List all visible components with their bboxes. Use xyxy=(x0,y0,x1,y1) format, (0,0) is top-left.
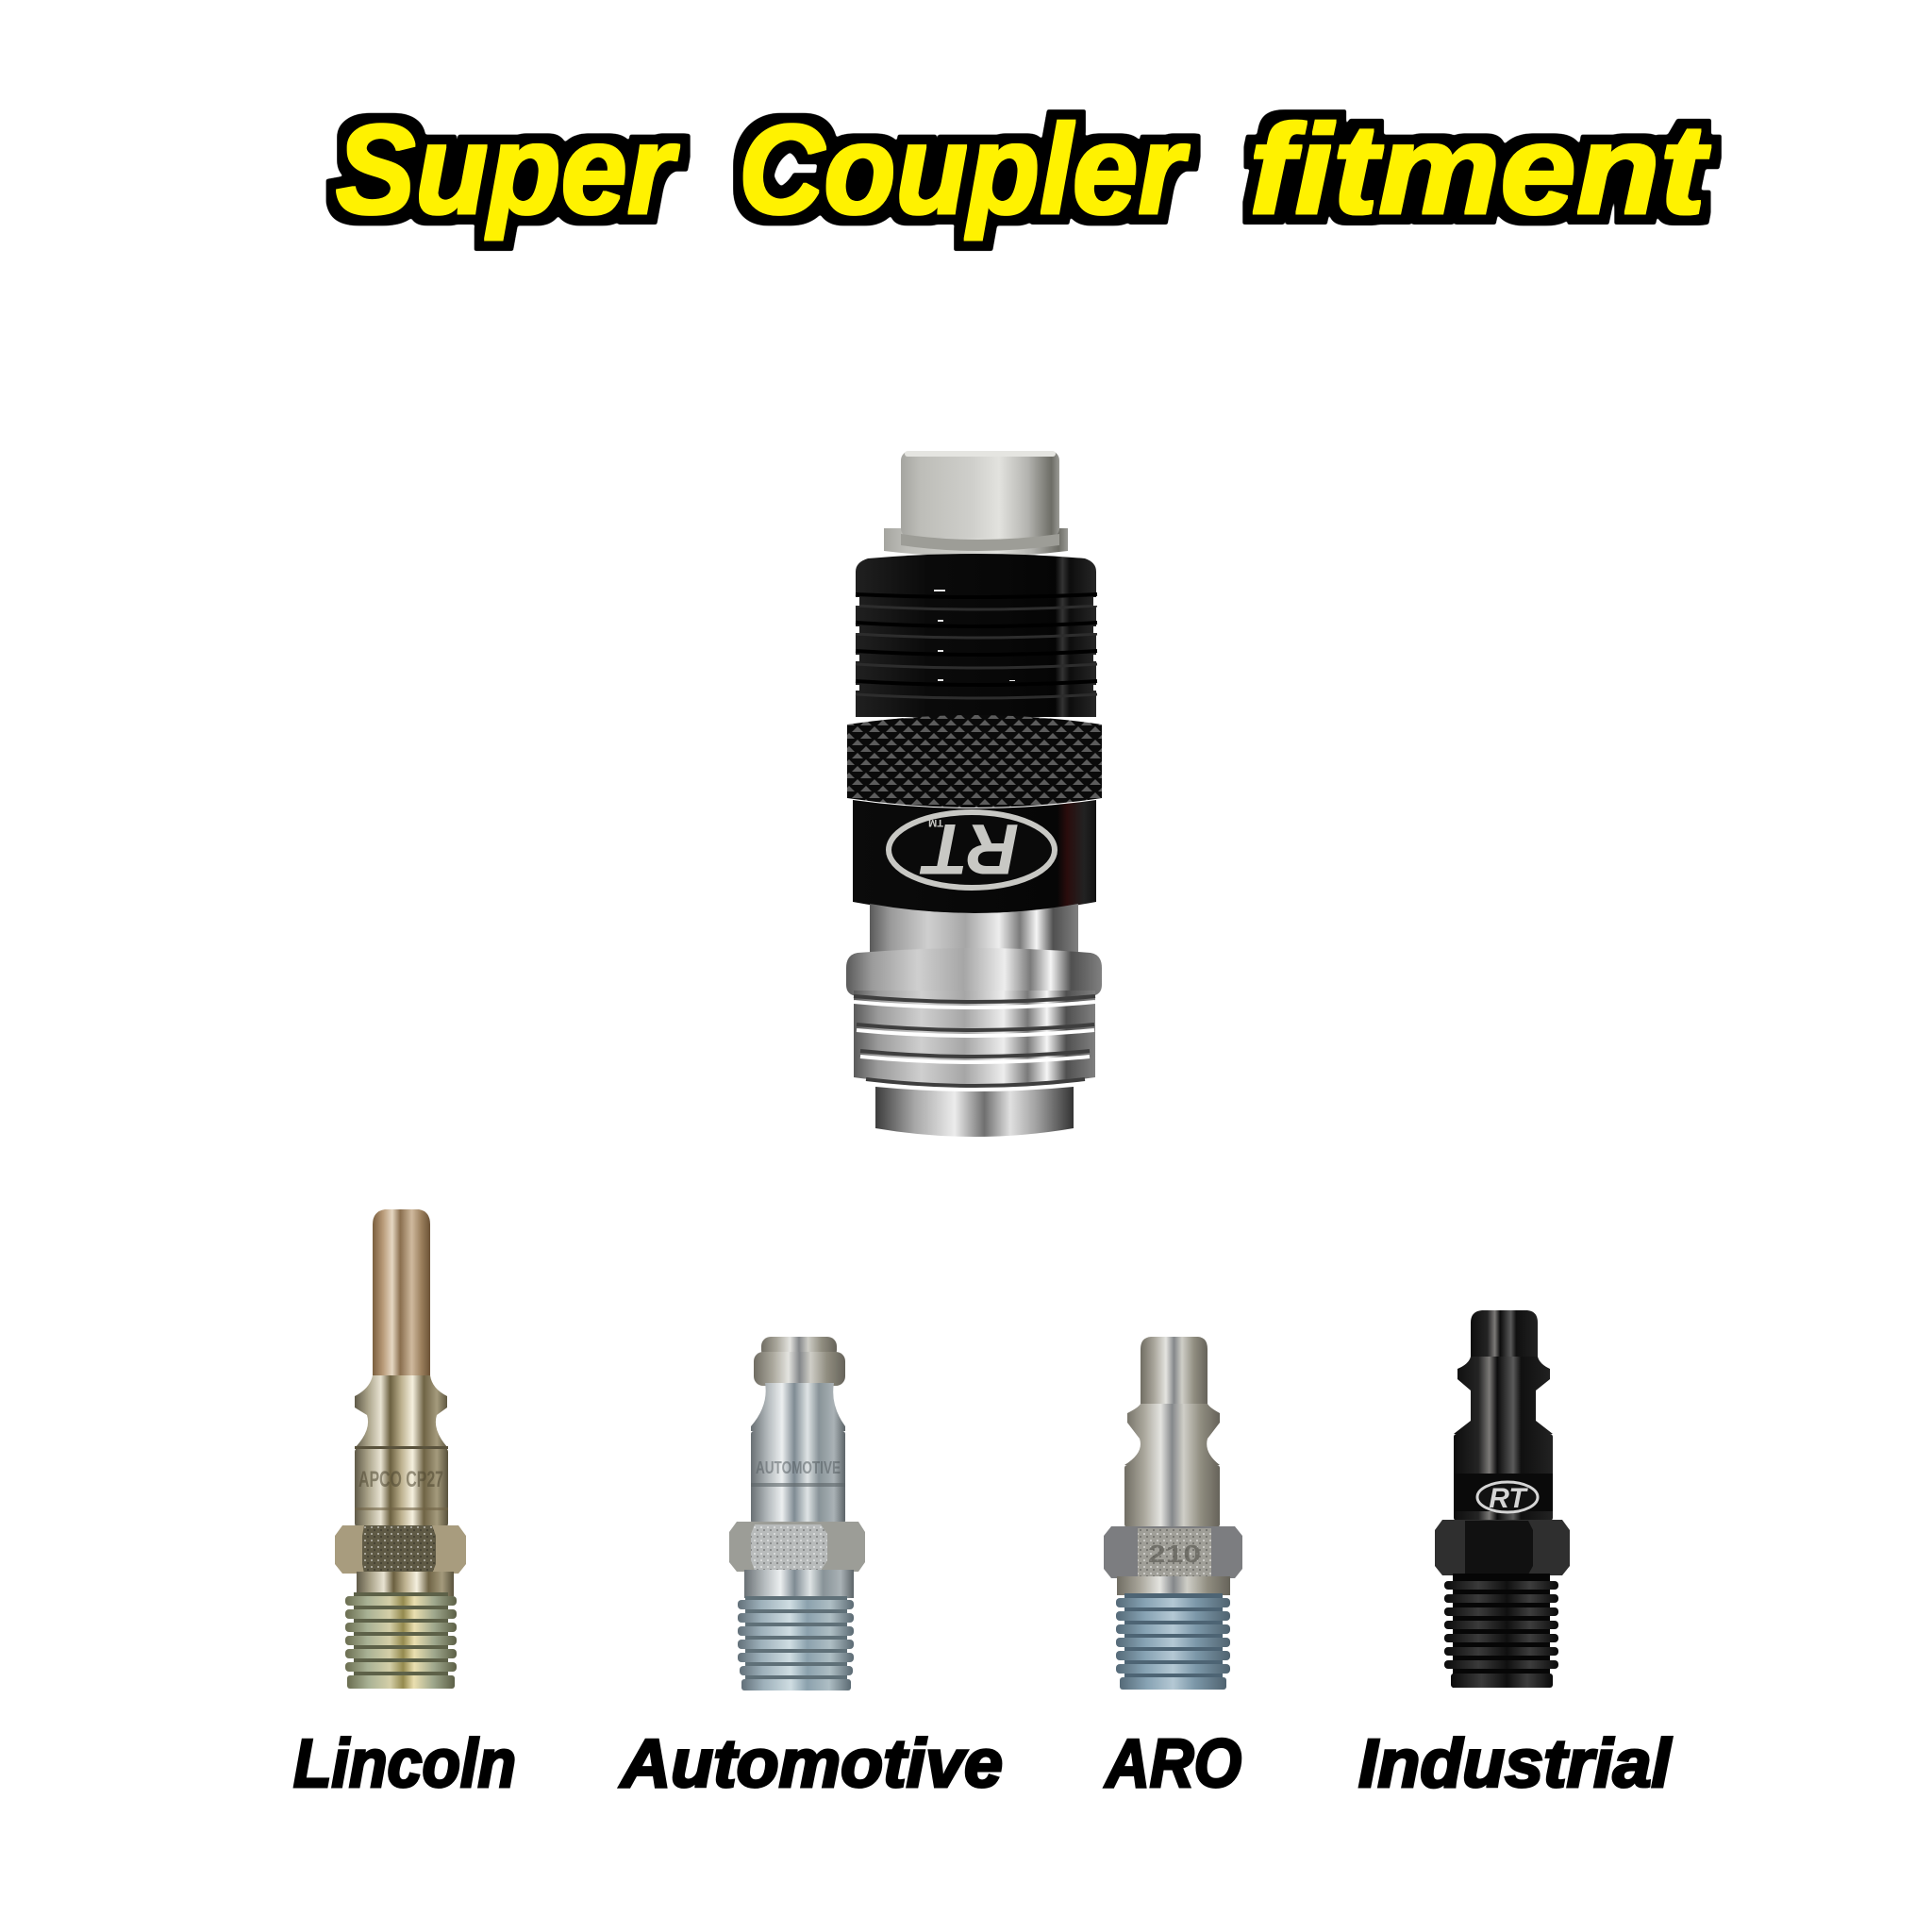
logo oval: TM xyxy=(928,817,943,828)
label: Automotive: Automotive xyxy=(619,1726,1003,1802)
ARO hex xyxy=(1104,1526,1242,1578)
Industrial logo xyxy=(1477,1482,1538,1514)
Industrial logo: RT xyxy=(1489,1483,1528,1514)
ARO thread xyxy=(1116,1593,1230,1690)
Automotive barrel xyxy=(751,1383,845,1524)
Automotive barrel: AUTOMOTIVE xyxy=(756,1458,841,1477)
Automotive hex xyxy=(729,1522,865,1572)
ARO hex: 210 xyxy=(1148,1540,1201,1568)
coupler black grooved body xyxy=(854,554,1099,717)
title: Super xyxy=(336,98,679,241)
Lincoln barrel: APCO CP27 xyxy=(358,1467,443,1492)
ARO collar xyxy=(1117,1576,1230,1595)
Automotive collar xyxy=(744,1570,854,1598)
Automotive thread xyxy=(738,1596,854,1690)
Lincoln collar xyxy=(357,1572,454,1596)
logo oval: RT xyxy=(919,808,1019,889)
Industrial thread xyxy=(1444,1574,1558,1688)
Industrial barrel xyxy=(1454,1357,1553,1521)
coupler knurled grip xyxy=(847,715,1102,808)
ARO barrel xyxy=(1124,1404,1220,1527)
coupler top sleeve xyxy=(884,451,1068,557)
ARO pin xyxy=(1141,1337,1208,1407)
plug: Automotive xyxy=(729,1337,865,1690)
title: fitment xyxy=(1249,98,1710,241)
label: Industrial: Industrial xyxy=(1358,1726,1673,1802)
Lincoln thread xyxy=(345,1592,457,1689)
label: ARO: ARO xyxy=(1104,1726,1241,1802)
Lincoln barrel xyxy=(355,1375,448,1527)
coupler chrome ribs xyxy=(854,991,1095,1086)
coupler lower black band xyxy=(853,800,1096,913)
plug: Lincoln xyxy=(335,1209,466,1689)
label: Lincoln: Lincoln xyxy=(293,1726,516,1802)
plug: ARO xyxy=(1104,1337,1242,1690)
Automotive tip xyxy=(754,1337,845,1386)
Industrial hex xyxy=(1435,1520,1570,1575)
title xyxy=(336,98,1710,241)
coupler chrome collar xyxy=(846,948,1102,996)
Lincoln pin xyxy=(373,1209,430,1379)
coupler chrome base xyxy=(875,1087,1074,1137)
main coupler xyxy=(846,451,1102,1137)
logo oval xyxy=(889,808,1055,889)
plug: Industrial xyxy=(1435,1310,1570,1688)
coupler chrome neck xyxy=(870,904,1078,958)
Industrial pin xyxy=(1471,1310,1538,1360)
Lincoln hex xyxy=(335,1525,466,1574)
title: Coupler xyxy=(739,98,1190,241)
